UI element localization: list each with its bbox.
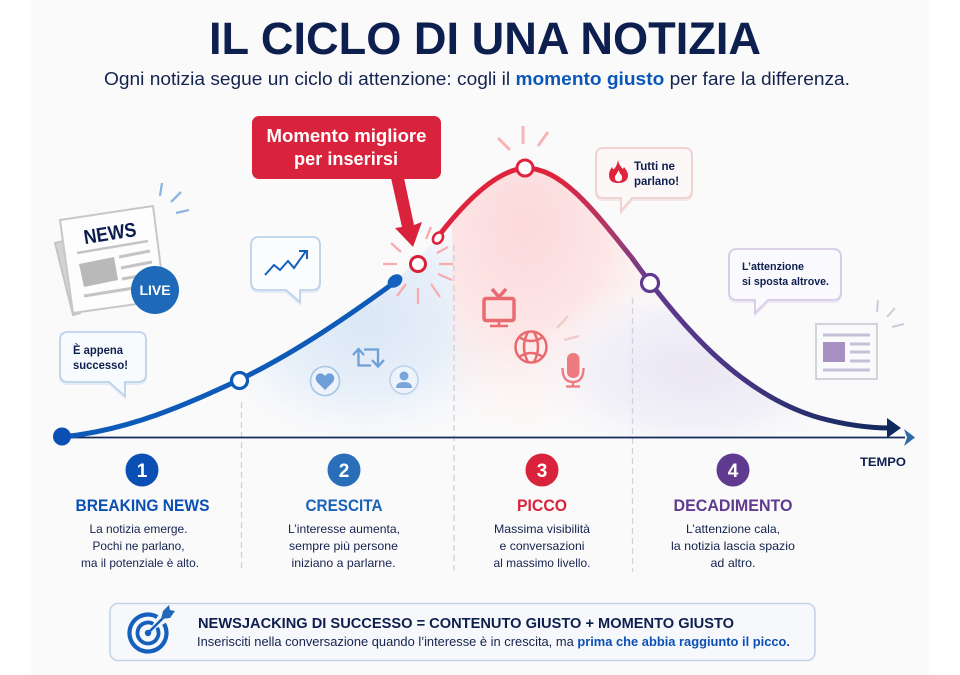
step 2: growth: sempre più persone — [289, 539, 398, 553]
step 3: peak: 3 — [537, 461, 547, 482]
step 3: peak: PICCO — [517, 496, 567, 515]
curve arrowhead — [887, 418, 901, 438]
callout: best moment: Momento migliore — [266, 125, 426, 146]
label: time: TEMPO — [860, 455, 906, 469]
icon: flame — [609, 160, 628, 183]
step 4: decay: L’attenzione cala, — [686, 522, 780, 536]
step 3: peak: e conversazioni — [500, 539, 584, 553]
step 3: peak — [494, 454, 590, 570]
step 4: decay: DECADIMENTO — [674, 496, 792, 515]
time axis — [70, 429, 915, 446]
panel: newsjacking takeaway: Inserisciti nella conversazione quando l’interesse è in crescita, ma prima che abbia raggiunto il picco. — [197, 635, 790, 649]
icon: faded article — [816, 324, 877, 379]
node: peak with rays — [498, 126, 548, 176]
curve: breaking news and growth — [62, 282, 395, 437]
bubble: everyone talks: parlano! — [634, 176, 679, 188]
icon: television — [484, 289, 514, 326]
curve red start cap — [431, 231, 445, 245]
step 4: decay: 4 — [728, 461, 739, 482]
title: IL CICLO DI UNA NOTIZIA — [209, 13, 761, 64]
subtitle: Ogni notizia segue un ciclo di attenzione: cogli il momento giusto per fare la differenza. — [104, 69, 850, 89]
bubble: everyone talks — [596, 148, 692, 213]
icon: newspaper — [55, 206, 179, 315]
step 1: breaking news: ma il potenziale è alto. — [81, 556, 199, 570]
icon: target — [129, 605, 175, 652]
bubble: attention shifts — [729, 249, 841, 315]
step 1: breaking news — [76, 454, 210, 570]
curve start point — [53, 428, 71, 446]
rays: microphone — [557, 316, 579, 340]
icon: globe — [516, 332, 546, 362]
step 3: peak: Massima visibilità — [494, 522, 590, 536]
step 4: decay: la notizia lascia spazio — [671, 539, 795, 553]
callout: best moment — [252, 116, 441, 247]
step 2: growth: 2 — [339, 461, 349, 482]
step 1: breaking news: La notizia emerge. — [90, 522, 188, 536]
panel: newsjacking takeaway — [110, 604, 815, 660]
node: decay — [642, 274, 658, 292]
icon: newspaper: LIVE — [139, 282, 171, 298]
bubble: trending chart — [251, 237, 320, 304]
rays: faded article — [877, 300, 904, 327]
bubble: just happened: È appena — [73, 344, 124, 357]
icon: newspaper: NEWS — [82, 219, 138, 249]
step 1: breaking news: 1 — [137, 461, 148, 482]
icon: heart — [310, 366, 340, 396]
panel: newsjacking takeaway: NEWSJACKING DI SUCCESSO = CONTENUTO GIUSTO + MOMENTO GIUSTO — [198, 616, 734, 632]
step 2: growth: CRESCITA — [306, 496, 382, 515]
bubble: attention shifts: L’attenzione — [742, 261, 804, 273]
icon: microphone — [562, 353, 584, 386]
bubble: just happened — [60, 332, 146, 398]
curve: peak and decay — [437, 168, 890, 428]
icon: person — [390, 366, 418, 394]
step 4: decay: ad altro. — [710, 556, 756, 570]
bubble: everyone talks: Tutti ne — [634, 161, 675, 173]
step 1: breaking news: BREAKING NEWS — [76, 496, 210, 515]
step 2: growth: L’interesse aumenta, — [288, 522, 400, 536]
dashed phase dividers — [242, 245, 632, 572]
curve blue end cap — [385, 271, 405, 291]
icon: repost arrows — [353, 349, 384, 366]
step 4: decay — [671, 454, 795, 570]
rays: newspaper — [160, 183, 189, 213]
step 2: growth — [288, 454, 400, 570]
bubble: just happened: successo! — [73, 360, 128, 372]
step 3: peak: al massimo livello. — [494, 556, 590, 570]
node: growth — [232, 372, 248, 388]
step 1: breaking news: Pochi ne parlano, — [92, 539, 184, 553]
callout: best moment: per inserirsi — [294, 148, 398, 169]
step 2: growth: iniziano a parlarne. — [292, 556, 396, 570]
area fills under the curve — [259, 172, 780, 430]
node: best moment with rays — [383, 227, 453, 304]
bubble: attention shifts: si sposta altrove. — [742, 276, 829, 288]
